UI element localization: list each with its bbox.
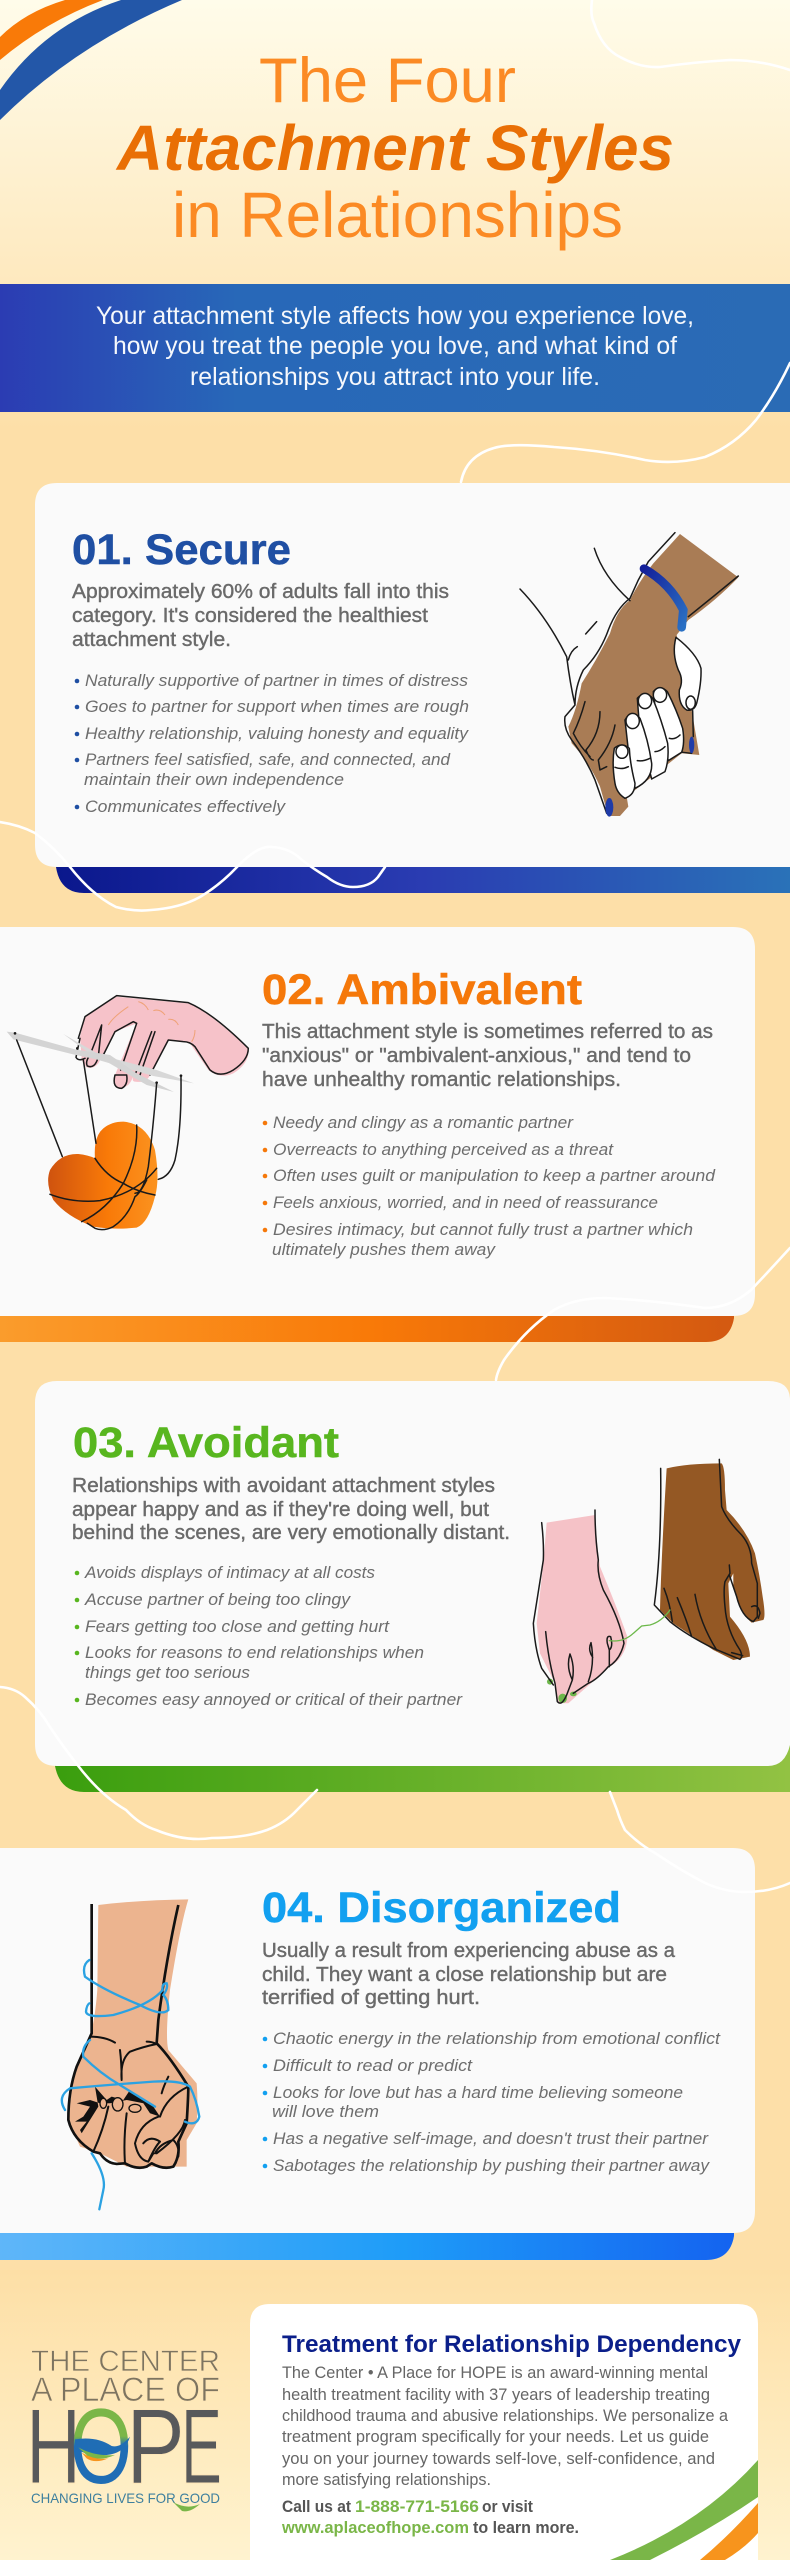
- bullet list: avoidant: Avoids displays of intimacy at all costs: [84, 1563, 375, 1582]
- bullet list: ambivalent: Feels anxious, worried, and in need of reassurance: [273, 1193, 658, 1212]
- bullet list: secure: Healthy relationship, valuing honesty and equality: [85, 724, 470, 743]
- bullet list: secure: maintain their own independence: [84, 770, 344, 789]
- bullet list: avoidant: Accuse partner of being too clingy: [84, 1590, 352, 1609]
- logo wordmark: hope: O: [70, 2386, 132, 2506]
- call to action: [281, 2497, 579, 2537]
- intro band: [0, 284, 790, 412]
- body text: treatment: The Center • A Place for HOPE is an award-winning mental: [282, 2363, 708, 2382]
- bullet list: disorganized: Difficult to read or predict: [273, 2056, 473, 2075]
- call to action: Call us at: [282, 2497, 351, 2516]
- illustration: fist tied with string: [62, 1899, 199, 2209]
- bullet list: disorganized: Chaotic energy in the relationship from emotional conflict: [273, 2029, 721, 2048]
- description: avoidant: Relationships with avoidant attachment styles: [72, 1475, 495, 1497]
- body text: treatment: treatment program specifically for your needs. Let us guide: [282, 2427, 709, 2446]
- body text: treatment: [282, 2363, 729, 2489]
- bullet list: avoidant: [75, 1563, 463, 1709]
- logo wordmark: hope: E: [181, 2386, 222, 2506]
- logo: the center a place of hope: THE CENTER: [31, 2345, 220, 2378]
- panel: 01 secure: [35, 483, 790, 893]
- description: avoidant: appear happy and as if they're doing well, but: [72, 1499, 489, 1521]
- bullet list: secure: Naturally supportive of partner in times of distress: [85, 671, 469, 690]
- description: ambivalent: This attachment style is sometimes referred to as: [262, 1021, 713, 1043]
- bullet list: ambivalent: [263, 1113, 716, 1259]
- call to action: 1-888-771-5166: [355, 2497, 479, 2516]
- intro band: how you treat the people you love, and what kind of: [113, 332, 677, 360]
- description: ambivalent: "anxious" or "ambivalent-anxious," and tend to: [262, 1045, 691, 1067]
- title: [115, 46, 674, 251]
- description: disorganized: child. They want a close relationship but are: [262, 1964, 667, 1986]
- panel: 02 ambivalent: [0, 927, 755, 1342]
- intro band: Your attachment style affects how you experience love,: [96, 302, 694, 330]
- call to action: or visit: [482, 2497, 533, 2516]
- heading: 04 disorganized: 04. Disorganized: [262, 1884, 621, 1932]
- logo tagline: CHANGING LIVES FOR GOOD: [31, 2490, 220, 2506]
- decorative white lines: [0, 0, 790, 1892]
- bullet list: disorganized: Has a negative self-image, and doesn't trust their partner: [273, 2129, 709, 2148]
- title: The Four: [259, 46, 516, 116]
- title: in Relationships: [172, 179, 623, 251]
- bullet list: avoidant: Looks for reasons to end relationships when: [85, 1643, 424, 1662]
- bullet list: ambivalent: ultimately pushes them away: [272, 1240, 497, 1259]
- bullet list: disorganized: Looks for love but has a hard time believing someone: [273, 2083, 683, 2102]
- description: disorganized: terrified of getting hurt.: [262, 1987, 480, 2009]
- bullet list: secure: Goes to partner for support when times are rough: [85, 697, 469, 716]
- illustration: puppet hand and heart: [7, 996, 248, 1230]
- swoosh: green and orange: [610, 2460, 758, 2560]
- illustration: holding hands: [520, 533, 738, 817]
- description: disorganized: Usually a result from experiencing abuse as a: [262, 1940, 676, 1962]
- bullet list: avoidant: things get too serious: [85, 1663, 251, 1682]
- bullet list: disorganized: [263, 2029, 721, 2175]
- description: disorganized: [262, 1940, 676, 2009]
- logo: the center a place of hope: A PLACE OF: [31, 2371, 220, 2409]
- bullet list: secure: Partners feel satisfied, safe, and connected, and: [85, 750, 451, 769]
- bullet list: disorganized: will love them: [272, 2102, 379, 2121]
- logo wordmark: hope: [26, 2386, 222, 2506]
- panel: 03 avoidant: [35, 1381, 790, 1792]
- bullet list: ambivalent: Overreacts to anything perceived as a threat: [273, 1140, 614, 1159]
- description: avoidant: behind the scenes, are very emotionally distant.: [72, 1522, 510, 1544]
- heading: 03 avoidant: 03. Avoidant: [73, 1419, 339, 1467]
- illustration: two hands apart: [533, 1459, 764, 1703]
- bullet list: disorganized: Sabotages the relationship by pushing their partner away: [273, 2156, 711, 2175]
- description: avoidant: [72, 1475, 510, 1544]
- corner swoosh: orange and blue: [0, 0, 182, 120]
- body text: treatment: health treatment facility with 37 years of leadership treating: [282, 2385, 710, 2404]
- description: ambivalent: have unhealthy romantic relationships.: [262, 1069, 621, 1091]
- panel: 04 disorganized: [0, 1848, 755, 2260]
- body text: treatment: more satisfying relationships.: [282, 2470, 491, 2489]
- logo: the center a place of hope: [26, 2345, 222, 2511]
- bullet list: secure: Communicates effectively: [85, 797, 287, 816]
- call to action: to learn more.: [473, 2518, 579, 2537]
- bullet list: ambivalent: Desires intimacy, but cannot fully trust a partner which: [273, 1220, 693, 1239]
- bullet list: ambivalent: Needy and clingy as a romantic partner: [273, 1113, 574, 1132]
- body text: treatment: childhood trauma and abusive relationships. We personalize a: [282, 2406, 729, 2425]
- intro band: relationships you attract into your life.: [190, 363, 600, 391]
- description: ambivalent: [262, 1021, 713, 1091]
- logo wave: [75, 2437, 130, 2461]
- logo wordmark: hope: P: [126, 2386, 185, 2506]
- logo wordmark: hope: H: [26, 2386, 81, 2506]
- heading: treatment: Treatment for Relationship Dependency: [282, 2331, 742, 2358]
- bullet list: ambivalent: Often uses guilt or manipulation to keep a partner around: [273, 1166, 716, 1185]
- description: secure: [72, 581, 449, 651]
- bullet list: avoidant: Becomes easy annoyed or critical of their partner: [85, 1690, 463, 1709]
- description: secure: attachment style.: [72, 629, 231, 651]
- bullet list: avoidant: Fears getting too close and getting hurt: [85, 1617, 390, 1636]
- title: Attachment Styles: [115, 112, 674, 184]
- description: secure: category. It's considered the healthiest: [72, 605, 428, 627]
- body text: treatment: you on your journey towards self-love, self-confidence, and: [282, 2449, 715, 2468]
- description: secure: Approximately 60% of adults fall into this: [72, 581, 449, 603]
- heading: 02 ambivalent: 02. Ambivalent: [262, 966, 582, 1014]
- bullet list: secure: [75, 671, 470, 816]
- panel: treatment info: [250, 2304, 758, 2560]
- call to action: www.aplaceofhope.com: [281, 2518, 469, 2537]
- heading: 01 secure: 01. Secure: [72, 526, 291, 574]
